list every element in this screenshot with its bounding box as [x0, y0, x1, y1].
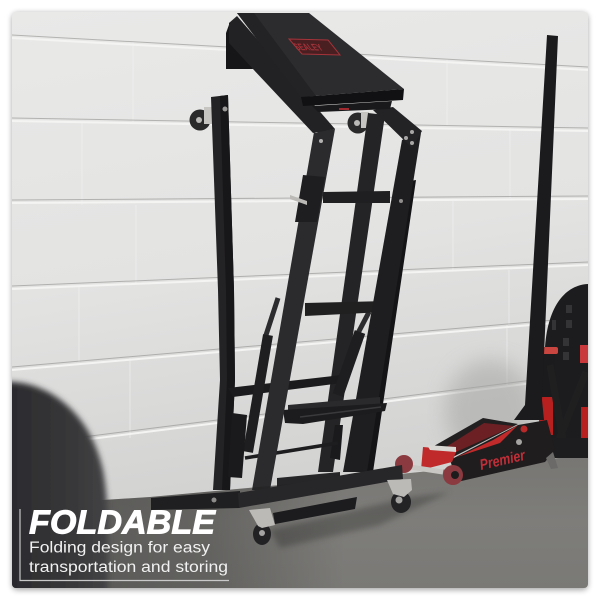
side handle [290, 195, 307, 205]
concrete floor [12, 455, 588, 588]
hinge plates [228, 413, 343, 478]
seat logo [289, 39, 340, 55]
rear left post [211, 95, 235, 490]
middle rear rail [318, 113, 385, 472]
blurred foreground tyre [5, 382, 108, 595]
trolley jack [395, 418, 558, 485]
lower step [283, 397, 387, 424]
base bar [151, 465, 403, 510]
seat support plate [226, 22, 253, 69]
wall wheel left [190, 107, 212, 130]
heading: FOLDABLE [29, 504, 217, 542]
gas strut right [344, 312, 372, 394]
front caster [249, 508, 275, 545]
middle step [305, 301, 374, 316]
right arm bracket [373, 107, 422, 148]
caption bracket [20, 509, 229, 580]
main front rail [252, 127, 335, 490]
description text [29, 540, 228, 576]
jack brand label: Premier [478, 447, 528, 474]
gas strut left [248, 298, 278, 452]
seat logo: SEALEY [291, 42, 326, 53]
seat pad [237, 13, 404, 112]
caption backdrop [12, 486, 300, 588]
seat support arm [229, 16, 335, 133]
top step [323, 191, 390, 203]
right caster [387, 479, 412, 513]
wall wheel right [348, 112, 369, 134]
tall jack handle pole [514, 35, 558, 420]
thin rod [245, 443, 338, 458]
description text: Folding design for easy [29, 540, 210, 556]
right side rail [343, 133, 421, 472]
description text: transportation and storing [29, 559, 228, 576]
brick wall [12, 12, 588, 512]
floor shadow [270, 492, 450, 548]
lower mid plate [277, 472, 340, 486]
cross bar [234, 376, 338, 397]
base platform [273, 497, 357, 524]
axle stands and tyre [539, 284, 588, 458]
